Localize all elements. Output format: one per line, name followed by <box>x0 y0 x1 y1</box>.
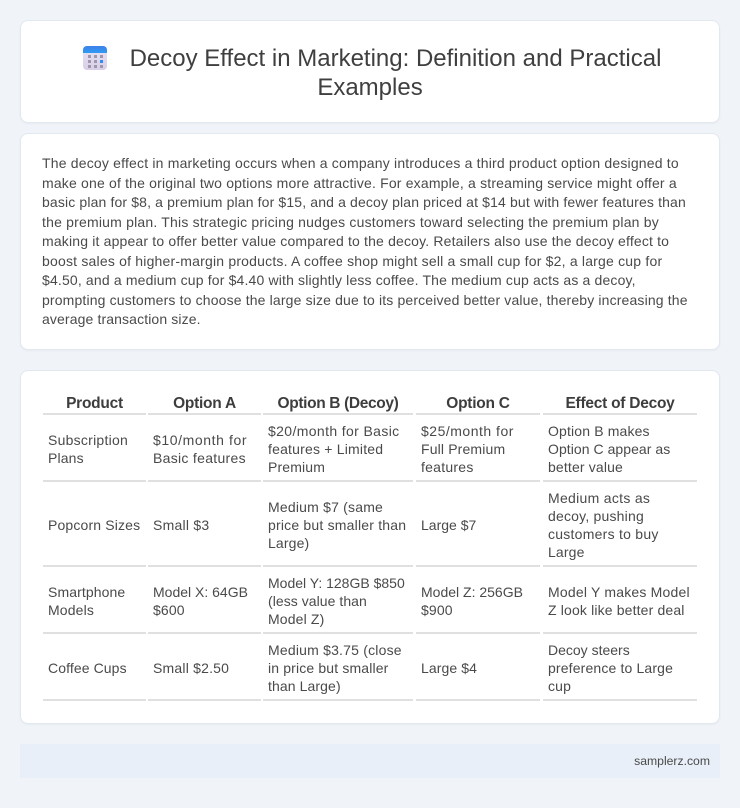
table row: subscription plans: $10/month for <box>153 432 247 448</box>
table row: smartphone models: (less value than <box>268 593 367 609</box>
table row: smartphone models: Model Z) <box>268 611 324 627</box>
table row: popcorn sizes: Medium acts as <box>548 490 650 506</box>
table row: smartphone models: Smartphone <box>48 584 125 600</box>
description text: prompting customers to choose the large size due to its perceived better value, thereby increasing the <box>42 292 688 308</box>
table row: subscription plans: Option C appear as <box>548 441 670 457</box>
table row: coffee cups: Decoy steers <box>548 642 630 658</box>
table row: subscription plans <box>43 423 697 482</box>
description text: boost sales of higher-margin products. A coffee shop might sell a small cup for $2, a large cup for <box>42 252 662 268</box>
table header row: Option B (Decoy) <box>278 395 398 412</box>
table row: coffee cups <box>43 642 697 701</box>
table row: subscription plans: Full Premium <box>421 441 505 457</box>
title <box>130 45 661 101</box>
table row: subscription plans: $20/month for Basic <box>268 423 400 439</box>
table row: popcorn sizes: Popcorn Sizes <box>48 517 140 533</box>
icon: calendar <box>83 46 107 70</box>
description text: $4.50, and a medium cup for $4.40 with slightly less coffee. The medium cup acts as a decoy, <box>42 272 636 288</box>
table row: smartphone models <box>43 575 697 634</box>
table row: popcorn sizes <box>43 490 697 567</box>
table row: popcorn sizes: price but smaller than <box>268 517 406 533</box>
table row: coffee cups: Small $2.50 <box>153 660 229 676</box>
description text: average transaction size. <box>42 311 201 327</box>
table row: coffee cups: cup <box>548 678 571 694</box>
table row: smartphone models: Model Y makes Model <box>548 584 690 600</box>
table row: smartphone models: Models <box>48 602 94 618</box>
footer bar <box>20 744 720 778</box>
table row: smartphone models: $900 <box>421 602 453 618</box>
table row: subscription plans: Subscription <box>48 432 128 448</box>
title: Decoy Effect in Marketing: Definition and Practical <box>130 45 661 72</box>
description text: make one of the original two options more attractive. For example, a streaming service might offer a <box>42 174 677 190</box>
table header row <box>43 395 697 415</box>
table header row: Option A <box>173 395 236 412</box>
table row: popcorn sizes: Large <box>548 544 585 560</box>
table header row: Product <box>66 395 123 412</box>
footer source text: samplerz.com <box>634 754 710 768</box>
table row: coffee cups: preference to Large <box>548 660 673 676</box>
description text <box>42 155 688 327</box>
table row: coffee cups: Large $4 <box>421 660 477 676</box>
table row: smartphone models: $600 <box>153 602 185 618</box>
table row: subscription plans: better value <box>548 459 623 475</box>
table row: smartphone models: Model X: 64GB <box>153 584 248 600</box>
table row: popcorn sizes: decoy, pushing <box>548 508 644 524</box>
table row: popcorn sizes: customers to buy <box>548 526 659 542</box>
title: Examples <box>317 74 423 101</box>
table row: subscription plans: Option B makes <box>548 423 650 439</box>
table row: popcorn sizes: Medium $7 (same <box>268 499 383 515</box>
table row: smartphone models: Z look like better deal <box>548 602 685 618</box>
table row: coffee cups: Medium $3.75 (close <box>268 642 402 658</box>
table header row: Option C <box>446 395 510 412</box>
table row: subscription plans: $25/month for <box>421 423 514 439</box>
table row: subscription plans: Plans <box>48 450 84 466</box>
panel: description <box>20 133 720 350</box>
table row: coffee cups: in price but smaller <box>268 660 388 676</box>
table row: coffee cups: than Large) <box>268 678 341 694</box>
table row: popcorn sizes: Small $3 <box>153 517 209 533</box>
description text: the premium plan. This strategic pricing nudges customers toward selecting the premium plan by <box>42 214 659 230</box>
table row: subscription plans: features + Limited <box>268 441 383 457</box>
table row: subscription plans: features <box>421 459 474 475</box>
table row: subscription plans: Basic features <box>153 450 246 466</box>
table row: smartphone models: Model Z: 256GB <box>421 584 523 600</box>
table row: popcorn sizes: Large) <box>268 535 309 551</box>
description text: The decoy effect in marketing occurs when a company introduces a third product option designed to <box>42 155 679 171</box>
table row: popcorn sizes: Large $7 <box>421 517 476 533</box>
description text: making it appear to offer better value compared to the decoy. Retailers also use the decoy effect to <box>42 233 669 249</box>
description text: basic plan for $8, a premium plan for $15, and a decoy plan priced at $14 but with fewer features than <box>42 194 686 210</box>
header panel <box>20 20 720 123</box>
panel: comparison table <box>20 370 720 724</box>
table header row: Effect of Decoy <box>565 395 675 412</box>
table row: smartphone models: Model Y: 128GB $850 <box>268 575 405 591</box>
table row: coffee cups: Coffee Cups <box>48 660 127 676</box>
table row: subscription plans: Premium <box>268 459 325 475</box>
